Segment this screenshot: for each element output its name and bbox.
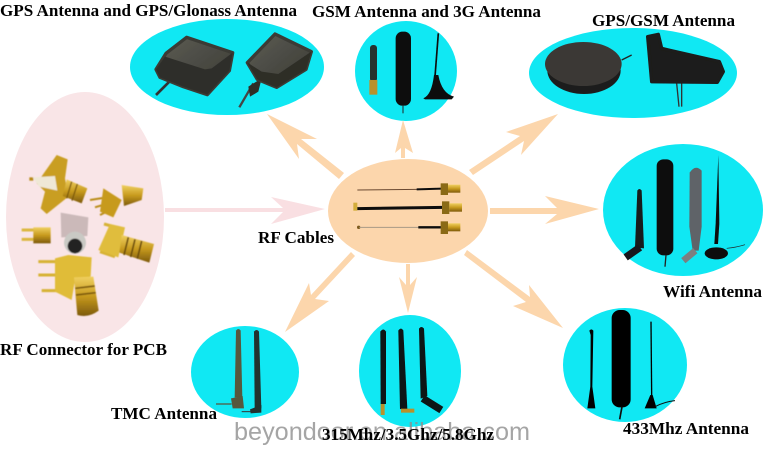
cyan ellipse — [603, 144, 763, 276]
heading: GPS Antenna and GPS/Glonass Antenna: GPS Antenna and GPS/Glonass Antenna — [0, 1, 297, 20]
GSM antennas — [369, 32, 454, 113]
panel: Wifi antenna — [603, 144, 763, 276]
panel: GPS/GSM antenna — [529, 28, 737, 118]
watermark: beyondoor.en.alibaba.com — [234, 418, 530, 446]
label: TMC Antenna: TMC Antenna — [111, 404, 217, 423]
cyan ellipse — [359, 315, 461, 427]
label: Wifi Antenna: Wifi Antenna — [663, 282, 762, 301]
label: 315Mhz/3.5Ghz/5.8Ghz: 315Mhz/3.5Ghz/5.8Ghz — [322, 425, 494, 444]
cyan ellipse — [130, 19, 324, 115]
panel: TMC antenna — [191, 326, 299, 418]
433Mhz antennas — [587, 310, 675, 419]
cyan ellipse — [563, 308, 687, 422]
connectors — [22, 155, 154, 316]
pink ellipse — [6, 92, 164, 342]
label: RF Connector for PCB: RF Connector for PCB — [0, 340, 167, 359]
cyan ellipse — [529, 28, 737, 118]
cyan ellipse — [355, 21, 457, 121]
cyan ellipse — [191, 326, 299, 418]
arrow: to GPS/GSM — [469, 114, 558, 175]
TMC antennas — [216, 329, 261, 413]
heading: GSM Antenna and 3G Antenna: GSM Antenna and 3G Antenna — [312, 2, 541, 21]
arrow: to 433Mhz — [464, 250, 563, 328]
GPS pucks — [156, 34, 311, 107]
label: 433Mhz Antenna: 433Mhz Antenna — [623, 419, 749, 438]
panel: 315Mhz antenna — [359, 315, 461, 427]
arrow: to TMC — [285, 252, 355, 332]
panel: RF connector for PCB — [6, 92, 164, 342]
peach ellipse — [328, 159, 488, 263]
panel: RF cables — [328, 159, 488, 263]
arrow: to GSM — [395, 120, 413, 158]
wifi antennas — [626, 155, 745, 267]
three black antennas — [380, 327, 441, 415]
panel: 433Mhz antenna — [563, 308, 687, 422]
round puck and shark fin — [545, 34, 723, 107]
three cables — [353, 183, 462, 234]
label: RF Cables: RF Cables — [258, 228, 334, 247]
arrow: to 315Mhz — [399, 264, 417, 313]
arrow: to RF cables from connector — [165, 197, 325, 224]
heading: GPS/GSM Antenna: GPS/GSM Antenna — [592, 11, 735, 30]
arrow: to Wifi — [490, 196, 599, 224]
arrow: to GPS — [267, 114, 344, 179]
panel: GSM antenna — [355, 21, 457, 121]
panel: GPS antenna — [130, 19, 324, 115]
